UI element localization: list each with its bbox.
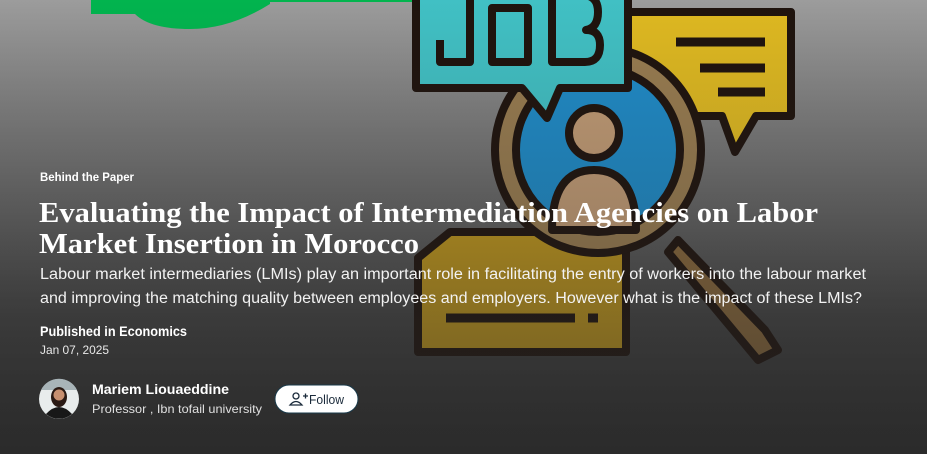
author name: Mariem Liouaeddine: [92, 381, 229, 397]
icon: person: [552, 108, 636, 230]
follow button: [275, 385, 358, 413]
icon: yellow chat bubble top right: [628, 12, 791, 152]
summary text: and improving the matching quality between employees and employers. However what is the impact of these LMIs?: [40, 290, 862, 307]
icon: bottom left document bubble: [418, 232, 626, 352]
icon: magnifier: [495, 47, 778, 360]
published in: Published in Economics: [40, 323, 187, 339]
summary text: Labour market intermediaries (LMIs) play an important role in facilitating the entry of workers into the labour market: [40, 266, 867, 283]
icon: add user: [290, 393, 308, 405]
author affiliation: Professor , Ibn tofail university: [92, 402, 262, 416]
title: Evaluating the Impact of Intermediation Agencies on Labor: [39, 197, 818, 229]
summary text: [40, 266, 867, 307]
illustration: job search: [416, 0, 791, 360]
follow button: Follow: [309, 392, 345, 407]
label: Behind the Paper: Behind the Paper: [40, 170, 134, 184]
title: [39, 197, 818, 260]
date: Jan 07, 2025: [40, 343, 109, 357]
title: Market Insertion in Morocco: [39, 228, 419, 260]
illustration: green shape: [91, 0, 421, 29]
icon: JOB bubble: [416, 0, 628, 118]
author avatar: [39, 379, 79, 419]
